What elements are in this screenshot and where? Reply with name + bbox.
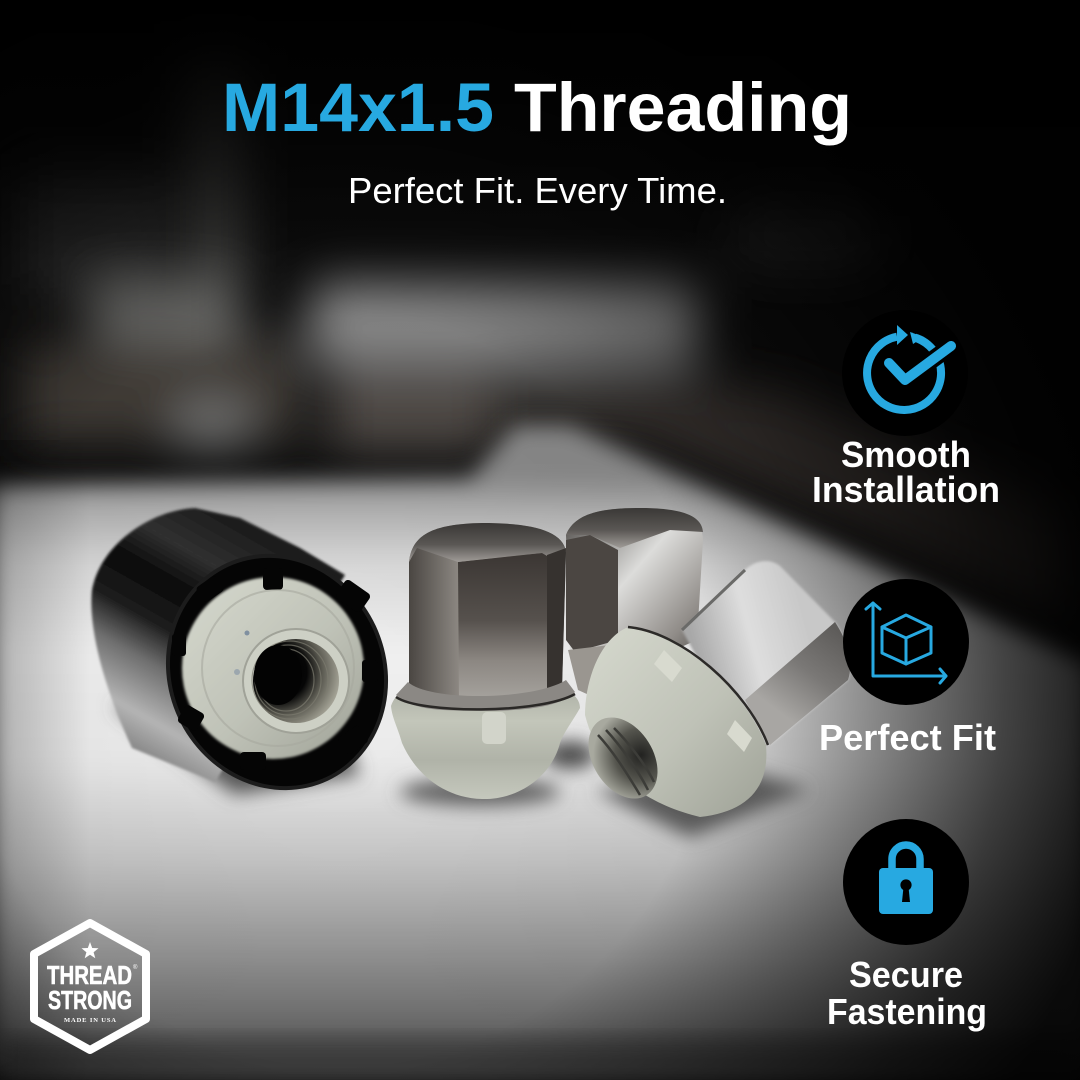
subtitle: Perfect Fit. Every Time.: [348, 170, 727, 211]
feature: perfect fit: [819, 579, 996, 758]
label: Fastening: [827, 991, 987, 1032]
logo: Thread Strong badge: ®: [133, 964, 138, 971]
label: [812, 434, 1000, 510]
label: Installation: [812, 469, 1000, 510]
title: [222, 69, 852, 146]
icon: padlock: [843, 819, 969, 945]
title: M14x1.5: [222, 69, 494, 146]
logo: Thread Strong badge: THREAD: [47, 960, 132, 990]
label: [827, 954, 987, 1032]
lock inner zinc face: [172, 568, 378, 770]
title: Threading: [514, 69, 852, 146]
lug nut behind: [566, 508, 703, 700]
label: Smooth: [841, 434, 971, 475]
label: Perfect Fit: [819, 717, 996, 758]
logo: Thread Strong badge: MADE IN USA: [64, 1017, 116, 1024]
feature: smooth installation: [812, 310, 1000, 510]
icon: cube with axes: [843, 579, 969, 705]
lock socket key cylinder: [91, 508, 427, 827]
logo: Thread Strong badge: [34, 923, 146, 1050]
icon: rotating check mark: [842, 310, 968, 436]
feature: secure fastening: [827, 819, 987, 1032]
tilted lug nut front right: [574, 561, 850, 817]
dome lug nut front: [391, 523, 580, 799]
shadows under the nuts: [112, 700, 810, 838]
logo: Thread Strong badge: STRONG: [48, 985, 132, 1015]
label: Secure: [849, 954, 963, 995]
